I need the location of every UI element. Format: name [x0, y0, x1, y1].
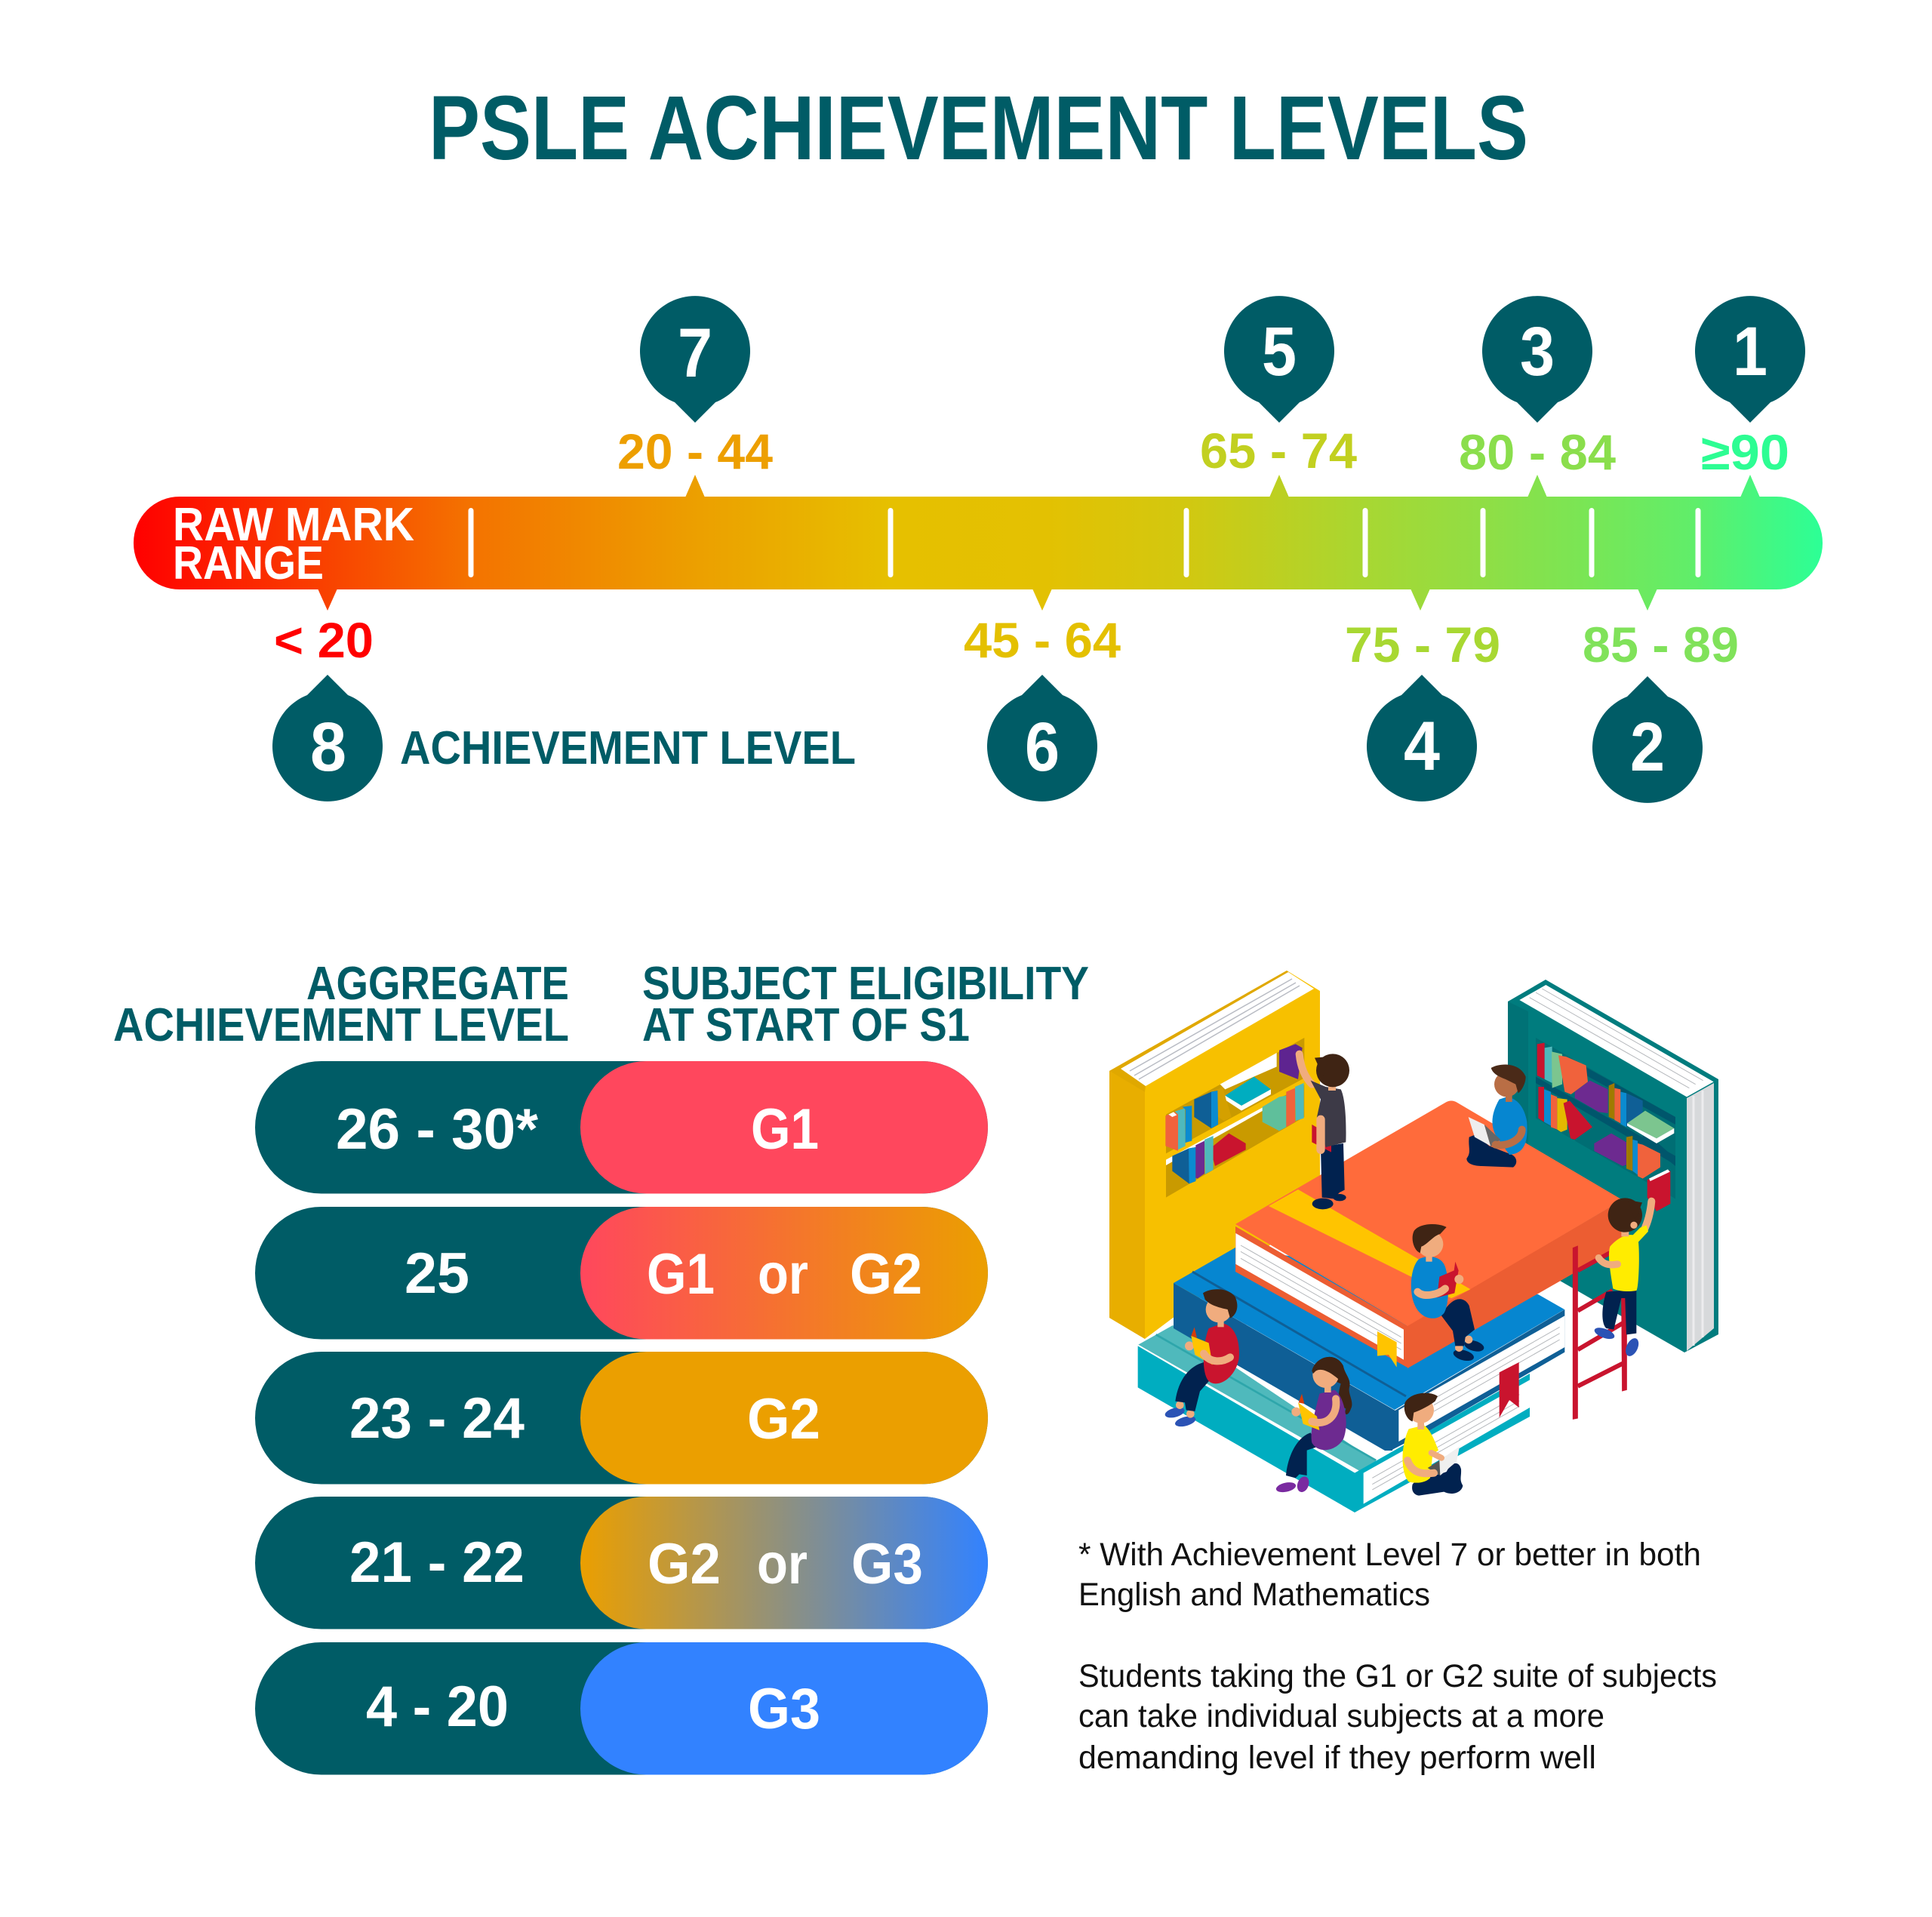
- table headings: [113, 958, 1089, 1051]
- row: 21-22 G2 or G3: or: [757, 1532, 808, 1596]
- row: 26-30 G1: G1: [751, 1097, 819, 1162]
- ladder: [1573, 1246, 1627, 1420]
- pin numbers: 8: [310, 709, 346, 786]
- bar label: RAW MARK: [173, 499, 414, 551]
- row: 4-20 G3: G3: [748, 1677, 820, 1741]
- raw mark range labels: 80 - 84: [1459, 424, 1616, 480]
- student: blue shirt sitting on orange book: [1411, 1224, 1485, 1363]
- table headings: AGGREGATE: [306, 958, 569, 1010]
- raw mark range bar: [134, 475, 1823, 611]
- row: 25 G1 or G2: G2: [850, 1242, 922, 1306]
- raw mark range labels: 45 - 64: [964, 612, 1121, 668]
- raw mark range labels: 85 - 89: [1583, 617, 1739, 672]
- student: girl in purple reading: [1275, 1357, 1352, 1494]
- middle blue book: [1174, 1248, 1564, 1451]
- pin numbers: 5: [1262, 313, 1297, 390]
- red bookmark: [1500, 1362, 1519, 1417]
- row: 23-24 G2: 23 - 24: [349, 1386, 525, 1451]
- eligibility table: [255, 1061, 988, 1775]
- row: 26-30 G1: [255, 1061, 988, 1194]
- table headings: SUBJECT ELIGIBILITY: [642, 958, 1089, 1010]
- footnotes: * With Achievement Level 7 or better in both: [1078, 1537, 1701, 1573]
- bar label: RANGE: [173, 537, 324, 589]
- student: red shirt reading: [1164, 1289, 1239, 1429]
- pin numbers: 6: [1025, 709, 1060, 786]
- raw mark range labels: 75 - 79: [1345, 617, 1500, 672]
- pin numbers: 3: [1520, 313, 1555, 390]
- footnotes: [1078, 1537, 1717, 1776]
- raw mark range labels: ≥90: [1701, 424, 1789, 480]
- bar pointers: [318, 475, 1760, 611]
- row: 23-24 G2: [255, 1352, 988, 1484]
- yellow bookshelf book: [1109, 971, 1320, 1339]
- achievement level legend: ACHIEVEMENT LEVEL: [400, 722, 856, 774]
- row: 4-20 G3: 4 - 20: [366, 1675, 509, 1739]
- pin numbers: 4: [1404, 708, 1440, 785]
- row: 23-24 G2: G2: [747, 1387, 820, 1451]
- raw mark range labels: [274, 423, 1789, 672]
- row: 21-22 G2 or G3: G3: [851, 1532, 923, 1596]
- row: 25 G1 or G2: or: [758, 1242, 808, 1306]
- raw mark range labels: 20 - 44: [617, 423, 773, 479]
- teal bookshelf book: [1508, 980, 1718, 1352]
- table headings: AT START OF S1: [642, 999, 970, 1051]
- pin numbers: 2: [1630, 709, 1665, 786]
- raw mark range labels: 65 - 74: [1200, 423, 1357, 478]
- pin numbers: 7: [678, 315, 712, 392]
- raw mark range labels: < 20: [274, 612, 374, 668]
- row: 21-22 G2 or G3: G2: [648, 1532, 721, 1596]
- table headings: ACHIEVEMENT LEVEL: [113, 999, 569, 1051]
- pin numbers: 1: [1733, 313, 1767, 390]
- illustration: students on giant books: [1109, 971, 1718, 1512]
- footnotes: demanding level if they perform well: [1078, 1740, 1596, 1776]
- student: blue shirt with laptop: [1466, 1064, 1527, 1168]
- row: 25 G1 or G2: G1: [647, 1242, 715, 1306]
- student: yellow shirt on ladder: [1593, 1198, 1651, 1359]
- footnotes: Students taking the G1 or G2 suite of subjects: [1078, 1658, 1717, 1694]
- row: 4-20 G3: [255, 1642, 988, 1775]
- pin numbers: [310, 313, 1767, 786]
- student: yellow shirt with laptop: [1403, 1393, 1463, 1496]
- row: 25 G1 or G2: 25: [405, 1242, 469, 1306]
- bottom teal book: [1138, 1325, 1530, 1512]
- bar label: [173, 499, 414, 589]
- footnotes: English and Mathematics: [1078, 1577, 1430, 1613]
- achievement level pins: [272, 296, 1805, 803]
- bar gradient: [134, 497, 1823, 589]
- row: 21-22 G2 or G3: [255, 1497, 988, 1629]
- top orange book: [1235, 1100, 1623, 1368]
- row: 21-22 G2 or G3: 21 - 22: [349, 1531, 525, 1595]
- student: grey shirt reaching for shelf: [1300, 1054, 1349, 1209]
- footnotes: can take individual subjects at a more: [1078, 1698, 1604, 1734]
- row: 26-30 G1: 26 - 30*: [336, 1097, 538, 1162]
- tick marks: [468, 508, 1701, 577]
- row: 25 G1 or G2: [255, 1207, 988, 1339]
- title: PSLE ACHIEVEMENT LEVELS: [429, 76, 1528, 179]
